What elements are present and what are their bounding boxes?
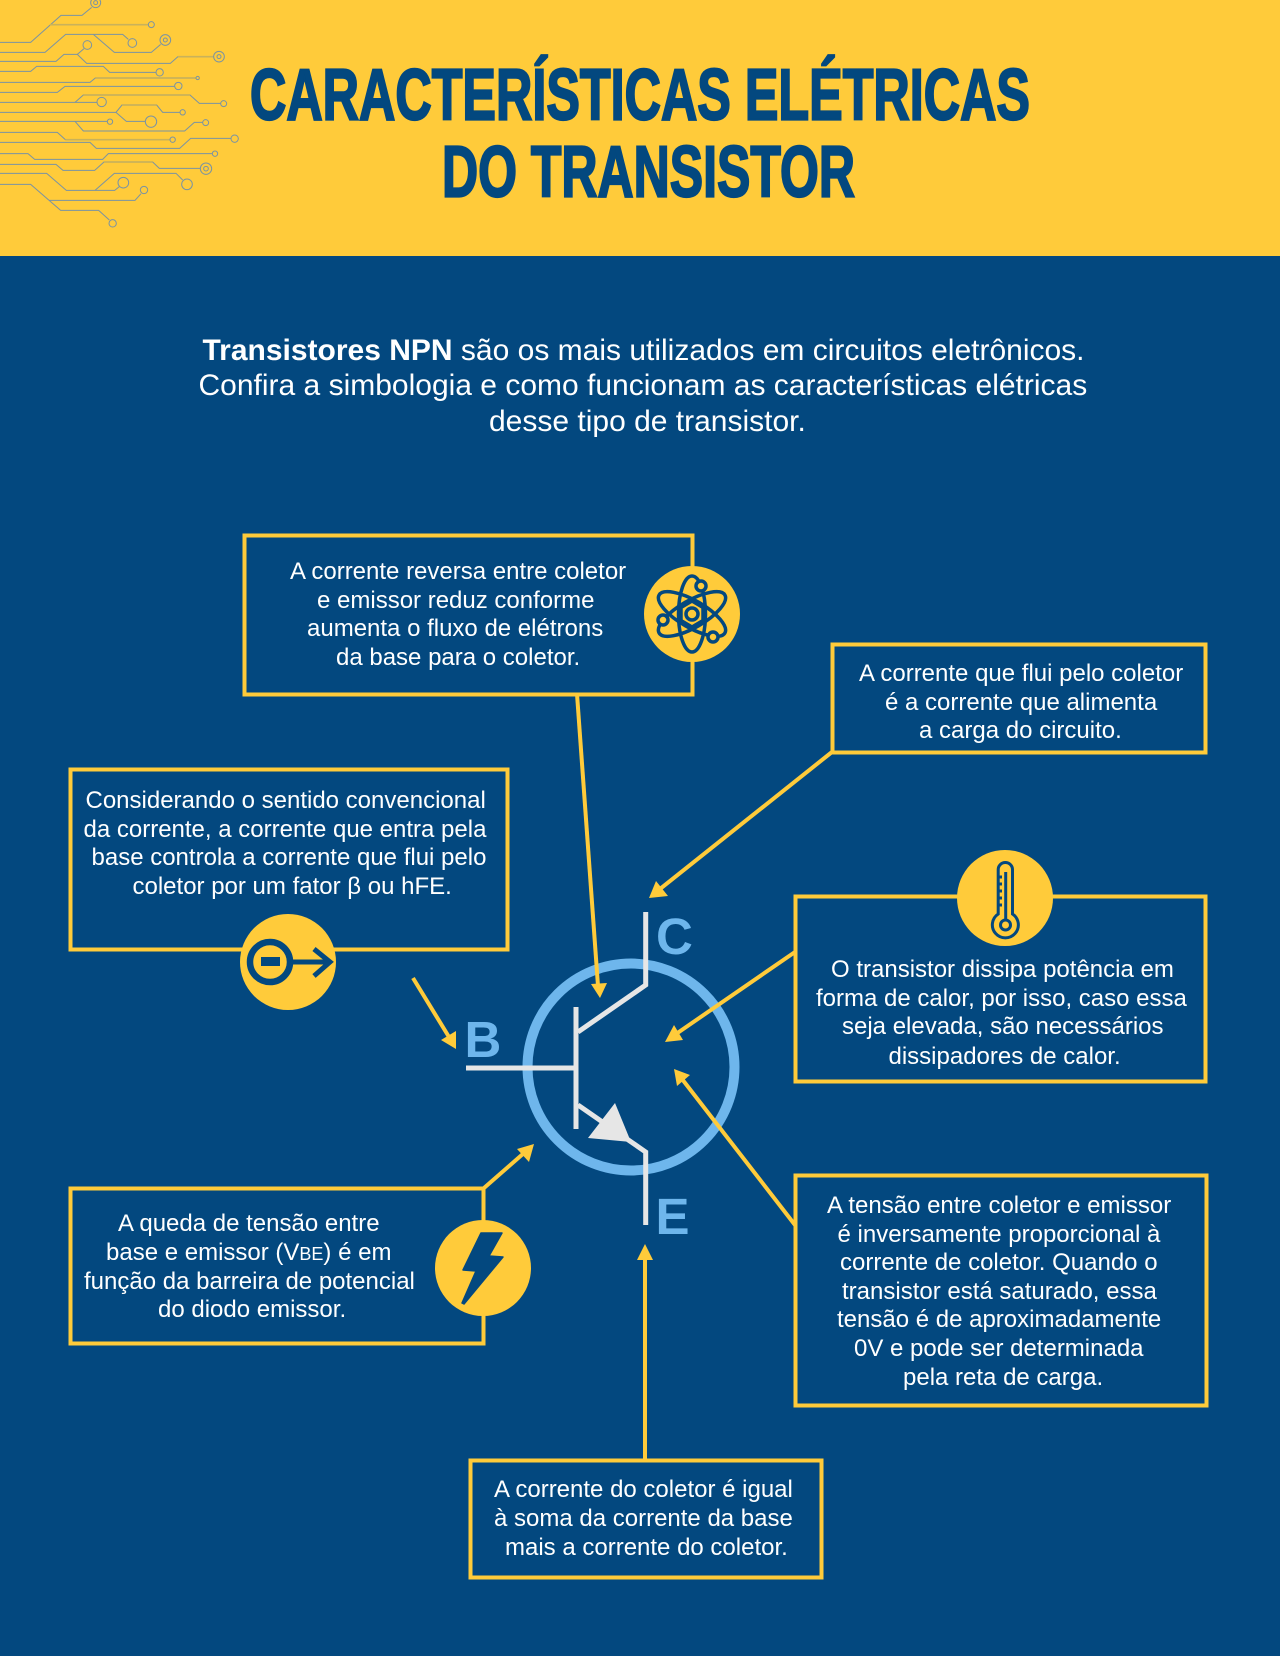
text <box>84 1210 415 1323</box>
text: 0V e pode ser determinada <box>854 1335 1144 1362</box>
text <box>816 956 1187 1070</box>
text: à soma da corrente da base <box>494 1505 793 1532</box>
icon: atom <box>644 566 740 662</box>
text: pela reta de carga. <box>903 1364 1103 1391</box>
arrow: collector current box to C <box>649 752 832 898</box>
text <box>84 787 487 900</box>
arrow: base box to B <box>413 978 456 1049</box>
arrow: top box to collector <box>577 694 607 998</box>
label B: B <box>464 1011 501 1068</box>
collector lead <box>578 912 646 1032</box>
intro text: Transistores NPN são os mais utilizados em circuitos eletrônicos. <box>202 334 1085 367</box>
text: A tensão entre coletor e emissor <box>827 1192 1171 1219</box>
panel: collector current <box>832 644 1206 752</box>
title <box>250 56 1030 212</box>
text: seja elevada, são necessários <box>842 1013 1164 1040</box>
text <box>290 558 626 671</box>
label E: E <box>656 1188 690 1245</box>
text: função da barreira de potencial <box>84 1268 415 1295</box>
text <box>827 1192 1171 1391</box>
text: é inversamente proporcional à <box>838 1221 1161 1248</box>
text: A corrente do coletor é igual <box>494 1476 793 1503</box>
transistor symbol <box>464 908 734 1245</box>
text: A corrente reversa entre coletor <box>290 558 626 585</box>
text: O transistor dissipa potência em <box>831 956 1174 983</box>
text: dissipadores de calor. <box>888 1043 1121 1070</box>
text: e emissor reduz conforme <box>317 587 594 614</box>
text: do diodo emissor. <box>158 1296 346 1323</box>
panel: current sum <box>470 1460 822 1578</box>
text: A corrente que flui pelo coletor <box>859 660 1183 687</box>
panel: base-emitter voltage <box>70 1188 531 1344</box>
text: base e emissor (VBE) é em <box>106 1239 391 1266</box>
text: Considerando o sentido convencional <box>86 787 486 814</box>
text: coletor por um fator β ou hFE. <box>132 873 452 900</box>
emitter arrowhead <box>588 1103 631 1142</box>
text: da corrente, a corrente que entra pela <box>84 816 487 843</box>
circuit decoration <box>0 0 238 227</box>
text: corrente de coletor. Quando o <box>840 1249 1158 1276</box>
text: base controla a corrente que flui pelo <box>92 844 486 871</box>
ring <box>528 964 734 1170</box>
base bar <box>574 1007 578 1129</box>
title: DO TRANSISTOR <box>442 132 855 212</box>
arrow: bottom box to E <box>637 1244 653 1460</box>
icon: thermometer <box>957 850 1053 946</box>
intro text: Confira a simbologia e como funcionam as características elétricas <box>198 369 1087 402</box>
text: a carga do circuito. <box>919 717 1122 744</box>
text: é a corrente que alimenta <box>885 689 1158 716</box>
text: mais a corrente do coletor. <box>505 1534 788 1561</box>
intro text: desse tipo de transistor. <box>489 405 806 438</box>
panel: base current <box>70 770 508 1010</box>
header band <box>0 0 1280 256</box>
text: aumenta o fluxo de elétrons <box>307 615 603 642</box>
panel: heat dissipation <box>796 850 1206 1082</box>
text <box>859 660 1183 744</box>
icon: lightning bolt <box>435 1220 531 1316</box>
emitter lead <box>578 1105 646 1225</box>
text: forma de calor, por isso, caso essa <box>816 985 1187 1012</box>
text: tensão é de aproximadamente <box>837 1306 1161 1333</box>
text: da base para o coletor. <box>336 644 580 671</box>
panel: collector-emitter voltage <box>796 1176 1206 1406</box>
base lead <box>466 1066 576 1070</box>
arrow: thermal box to centre <box>665 952 795 1042</box>
icon: electron arrow <box>240 914 336 1010</box>
arrow: tension box to centre <box>674 1069 795 1225</box>
text <box>494 1476 793 1561</box>
label C: C <box>656 908 693 965</box>
panel: reverse current <box>244 536 740 694</box>
intro text <box>198 334 1087 438</box>
text: transistor está saturado, essa <box>842 1278 1157 1305</box>
text: A queda de tensão entre <box>118 1210 380 1237</box>
arrow: VBE box to ring <box>484 1144 534 1188</box>
